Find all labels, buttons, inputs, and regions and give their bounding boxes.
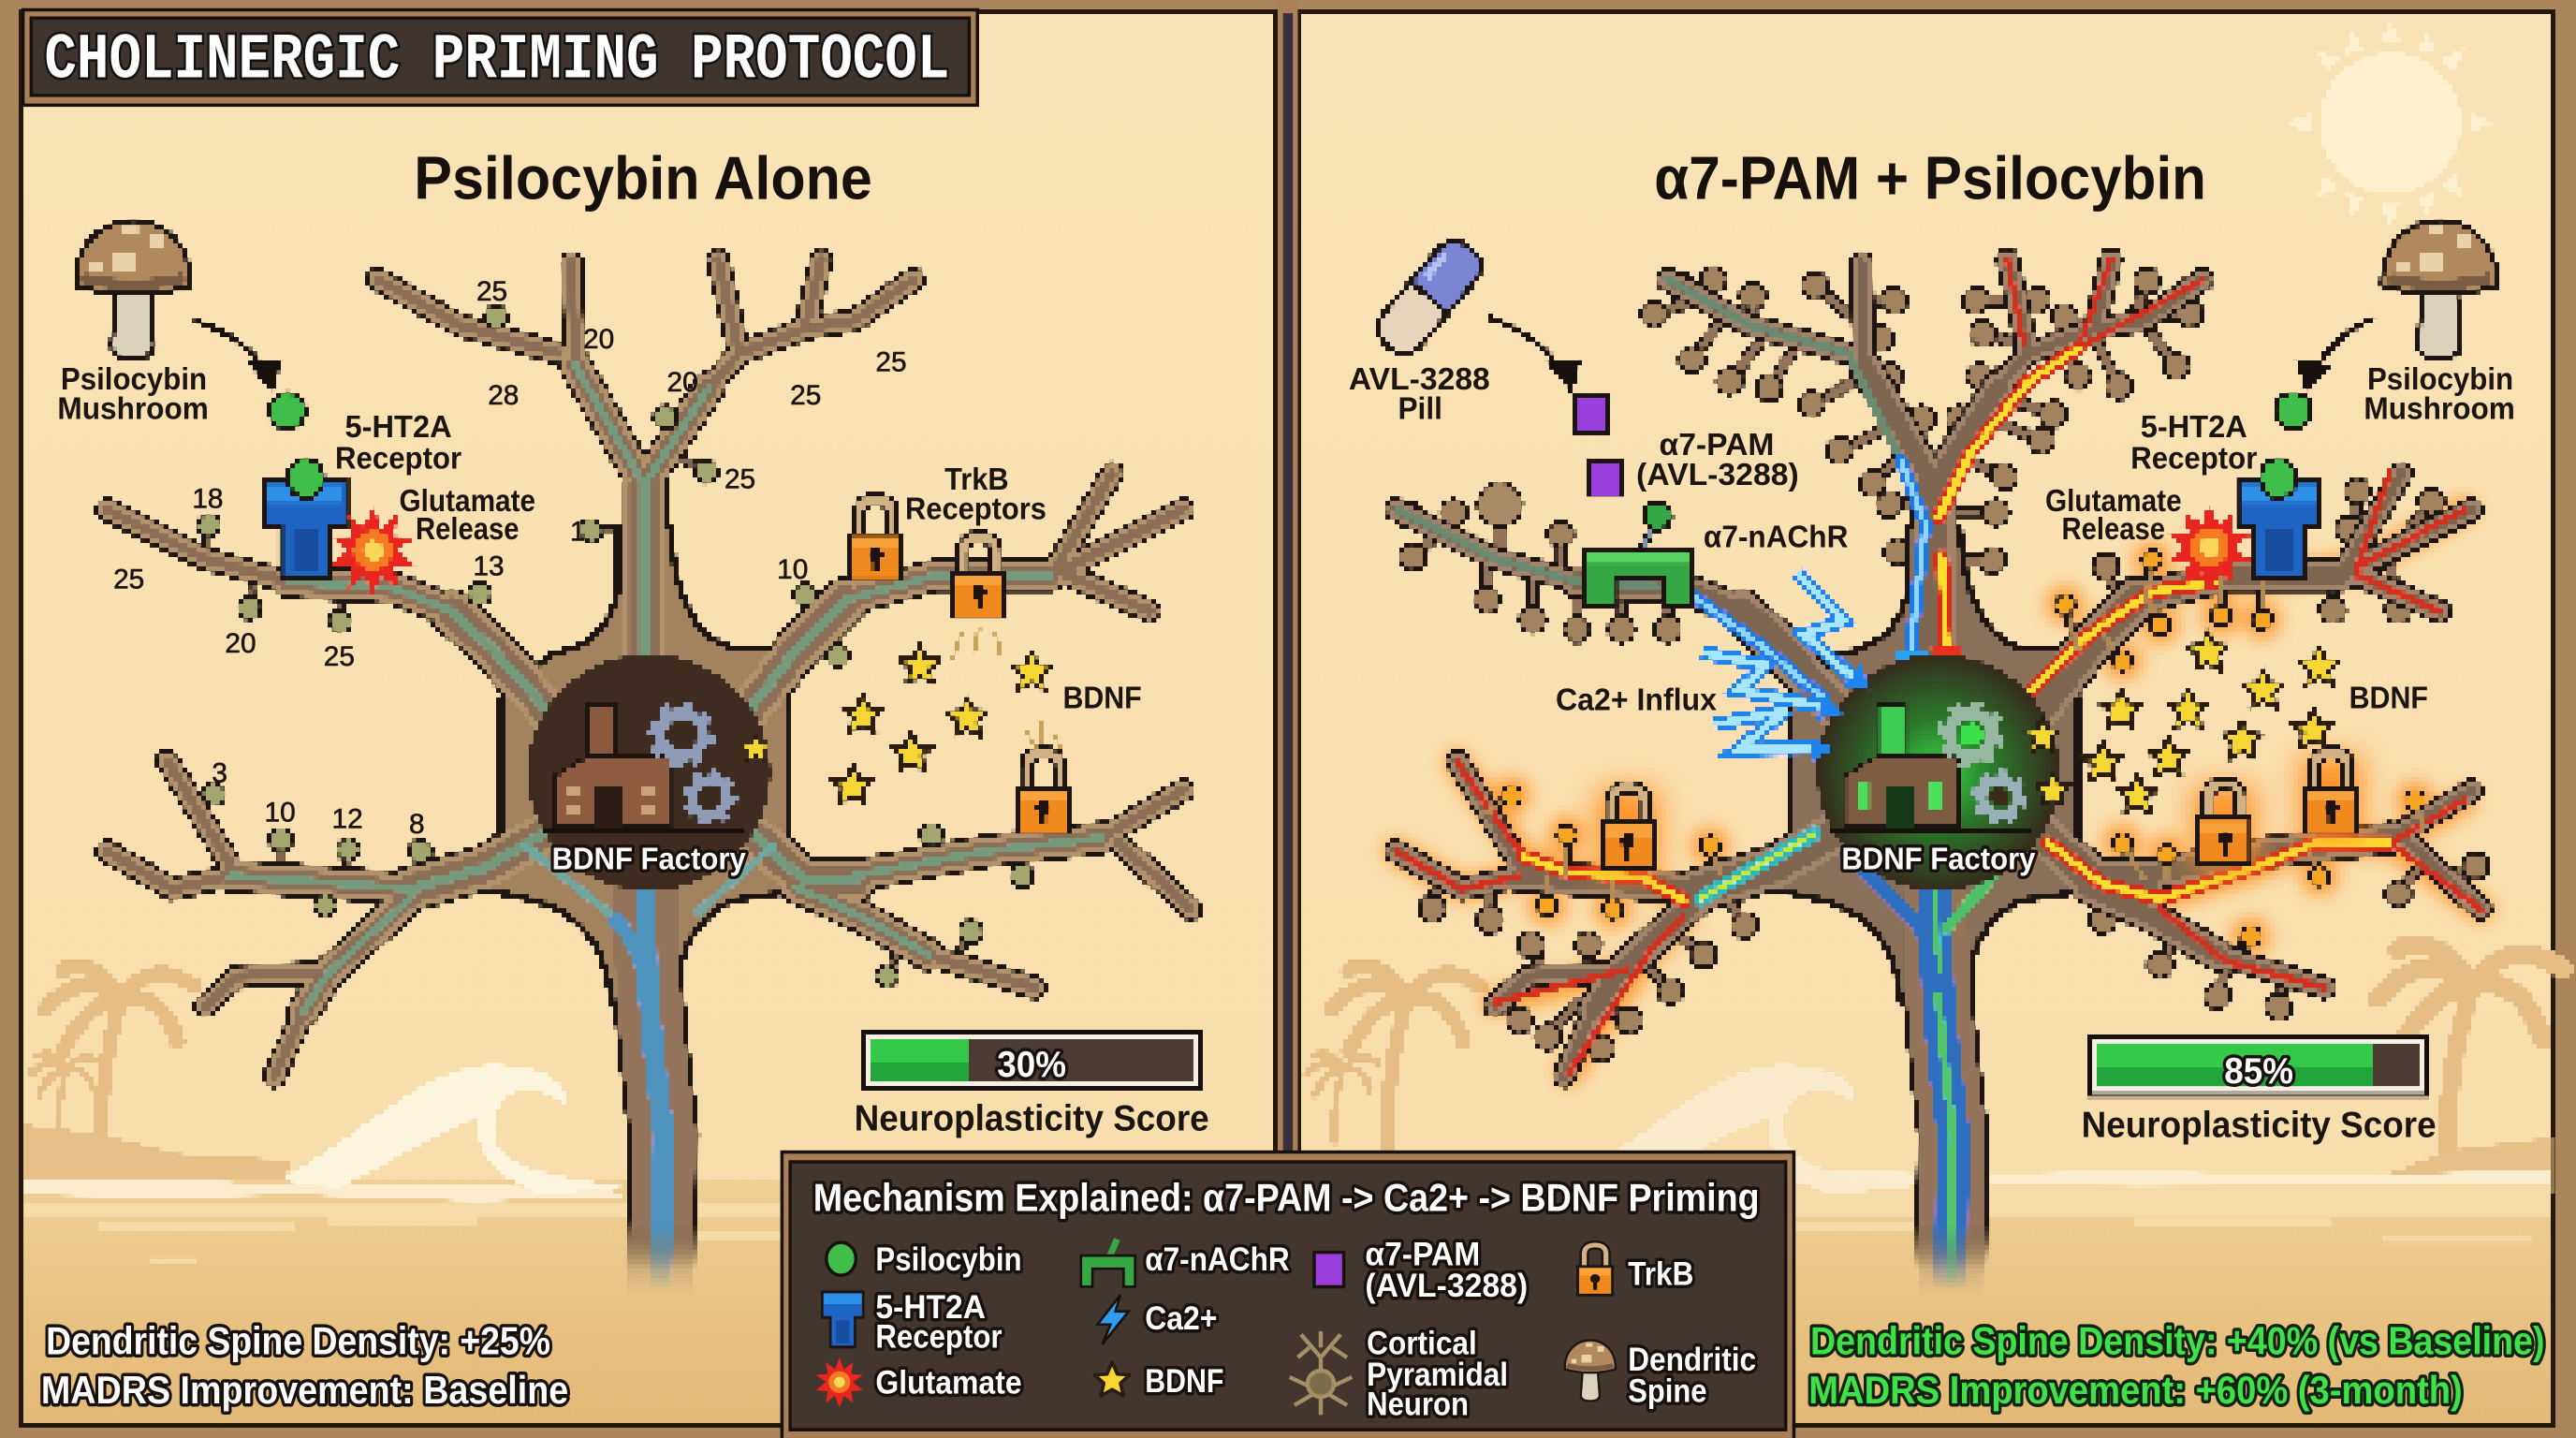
arrow: pill to PAM xyxy=(1488,317,1582,394)
icon: AVL-3288 pill xyxy=(1369,232,1489,362)
icons: TrkB locks xyxy=(849,500,1070,833)
labels: spine counts: 20 xyxy=(667,367,698,398)
scene: beach background right xyxy=(1297,13,2563,1427)
legend labels: (AVL-3288) xyxy=(1365,1268,1528,1304)
legend labels xyxy=(875,1237,1756,1422)
legend title: Mechanism Explained: α7-PAM -> Ca2+ -> BDNF Priming xyxy=(813,1176,1760,1220)
label: BDNF factory: BDNF Factory xyxy=(552,843,746,877)
label: neuroplasticity score right: Neuroplasticity Score xyxy=(2082,1106,2437,1146)
stats: left outcomes: Dendritic Spine Density: +25% xyxy=(46,1318,550,1362)
legend icons xyxy=(816,1240,1616,1415)
labels: spine counts: 18 xyxy=(192,483,224,514)
labels: right neuron annotations: AVL-3288 xyxy=(1349,362,1490,397)
labels: spine counts xyxy=(113,276,907,840)
legend labels: BDNF xyxy=(1145,1363,1223,1400)
labels: right neuron annotations: (AVL-3288) xyxy=(1636,458,1799,492)
panel: alpha7-PAM plus psilocybin xyxy=(1297,13,2563,1427)
label: neuroplasticity score: Neuroplasticity Score xyxy=(855,1099,1209,1139)
title text: CHOLINERGIC PRIMING PROTOCOL xyxy=(44,23,949,97)
labels: right neuron annotations: 5-HT2A xyxy=(2141,410,2247,445)
labels: spine counts: 25 xyxy=(324,641,355,672)
label: 85 percent value: 85% xyxy=(2224,1051,2293,1092)
labels: right neuron annotations: Receptor xyxy=(2130,441,2257,476)
labels: left neuron annotations: Release xyxy=(416,512,520,547)
labels: spine counts: 3 xyxy=(212,758,227,789)
legend labels: α7-nAChR xyxy=(1145,1241,1290,1278)
labels: right neuron annotations: Release xyxy=(2062,512,2165,547)
labels: spine counts: 25 xyxy=(790,380,821,411)
legend labels: α7-PAM xyxy=(1365,1237,1480,1273)
labels: spine counts: 13 xyxy=(473,550,505,581)
labels: right neuron annotations: Mushroom xyxy=(2364,392,2515,427)
labels: left neuron annotations: BDNF xyxy=(1062,682,1142,716)
legend labels: Glutamate xyxy=(875,1365,1022,1401)
labels: spine counts: 20 xyxy=(583,324,614,355)
labels: right neuron annotations: Pill xyxy=(1398,392,1442,427)
legend labels: Spine xyxy=(1628,1372,1706,1409)
icon: psilocybin molecule right xyxy=(2276,393,2311,429)
legend labels: Dendritic xyxy=(1628,1342,1756,1378)
icon: alpha7-nAChR channel xyxy=(1584,502,1693,607)
icon: 5-HT2A receptor right xyxy=(2237,459,2320,577)
labels: right neuron annotations: Psilocybin xyxy=(2367,362,2513,397)
icons: TrkB locks right xyxy=(1597,753,2363,871)
soma core with glowing factory xyxy=(1817,654,2071,890)
heading: alpha7-PAM plus psilocybin: α7-PAM + Psilocybin xyxy=(1654,143,2206,212)
labels: right neuron annotations: Glutamate xyxy=(2045,484,2182,519)
labels: left neuron annotations: Mushroom xyxy=(57,392,209,427)
legend labels: Psilocybin xyxy=(875,1241,1022,1278)
label: 30 percent value: 30% xyxy=(997,1045,1066,1085)
neuron: right pyramidal neuron xyxy=(1397,259,2481,1299)
labels: spine counts: 28 xyxy=(488,380,519,411)
icon: psilocybin mushroom xyxy=(76,220,191,359)
labels: spine counts: 25 xyxy=(113,564,144,594)
scene: beach background left xyxy=(20,13,1277,1427)
labels: spine counts: 10 xyxy=(265,798,296,829)
labels: spine counts: 25 xyxy=(724,463,755,494)
divider between panels xyxy=(1278,0,1297,1438)
labels: spine counts: 20 xyxy=(225,628,256,659)
icons: BDNF stars xyxy=(832,644,1052,803)
labels: spine counts: 25 xyxy=(875,347,907,378)
heading: psilocybin alone: Psilocybin Alone xyxy=(414,143,872,212)
panel: psilocybin alone xyxy=(20,13,1277,1427)
stats: right outcomes: MADRS Improvement: +60% (3-month) xyxy=(1808,1368,2463,1412)
bar: neuroplasticity 30 percent xyxy=(862,1031,1203,1092)
labels: left neuron annotations xyxy=(57,362,1142,716)
labels: spine counts: 12 xyxy=(332,804,363,835)
labels: left neuron annotations: Receptors xyxy=(905,492,1046,527)
icon: glutamate burst right xyxy=(2167,503,2252,594)
arrow: mushroom to psilocybin xyxy=(194,320,283,394)
labels: left neuron annotations: Receptor xyxy=(335,441,461,476)
label: BDNF factory right: BDNF Factory xyxy=(1841,843,2036,877)
labels: right neuron annotations: BDNF xyxy=(2349,682,2428,716)
icon: psilocybin mushroom right xyxy=(2382,220,2497,359)
drips: BDNF release xyxy=(953,628,1060,748)
stats: left outcomes: MADRS Improvement: Baseline xyxy=(41,1368,568,1412)
soma core with BDNF factory xyxy=(527,654,770,890)
legend labels: TrkB xyxy=(1628,1256,1693,1293)
stats: left outcomes xyxy=(41,1318,568,1412)
legend panel xyxy=(781,1151,1795,1438)
bar: neuroplasticity 85 percent xyxy=(2088,1035,2430,1098)
legend labels: Pyramidal xyxy=(1367,1357,1508,1393)
legend labels: Ca2+ xyxy=(1145,1300,1217,1337)
labels: spine counts: 25 xyxy=(476,276,507,307)
icon: psilocybin molecule xyxy=(270,393,305,429)
title plate xyxy=(22,8,979,107)
stats: right outcomes xyxy=(1808,1318,2544,1412)
labels: left neuron annotations: TrkB xyxy=(944,462,1009,497)
legend labels: Receptor xyxy=(875,1318,1003,1355)
labels: left neuron annotations: 5-HT2A xyxy=(345,410,452,445)
legend labels: Cortical xyxy=(1367,1325,1477,1361)
labels: right neuron annotations: Ca2+ Influx xyxy=(1556,682,1717,717)
legend labels: Neuron xyxy=(1367,1386,1469,1422)
icons: BDNF stars right xyxy=(2082,631,2340,814)
labels: spine counts: 10 xyxy=(777,554,808,585)
labels: right neuron annotations xyxy=(1349,362,2515,717)
icons: calcium lightning bolts xyxy=(1702,572,1869,763)
neuron: left pyramidal neuron xyxy=(107,259,1191,1299)
labels: right neuron annotations: α7-nAChR xyxy=(1704,521,1848,555)
labels: left neuron annotations: Psilocybin xyxy=(61,362,207,397)
icons: PAM molecules xyxy=(1573,396,1623,496)
icon: sun xyxy=(2287,20,2494,227)
labels: spine counts: 1 xyxy=(570,517,586,548)
icon: glutamate burst xyxy=(330,506,416,596)
legend labels: 5-HT2A xyxy=(875,1289,986,1326)
labels: spine counts: 8 xyxy=(409,809,425,840)
labels: right neuron annotations: α7-PAM xyxy=(1660,428,1774,462)
arrow: mushroom to psilocybin right xyxy=(2295,317,2376,394)
icon: 5-HT2A receptor xyxy=(265,459,346,577)
labels: left neuron annotations: Glutamate xyxy=(399,484,535,519)
